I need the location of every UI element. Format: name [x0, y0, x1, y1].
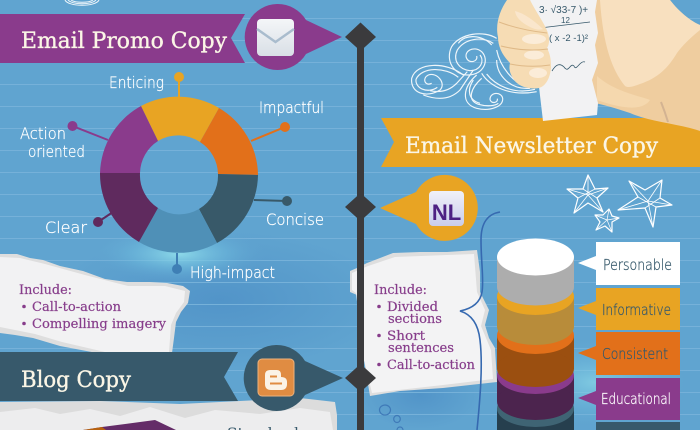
label: informative	[578, 288, 680, 330]
text: newsletter list	[374, 283, 476, 373]
callout: high-impact: High-impact	[190, 263, 275, 282]
fingers	[497, 0, 551, 88]
icon: star small	[567, 175, 608, 213]
bracket	[460, 212, 500, 430]
callout: concise	[254, 196, 324, 229]
label: consistent: Consistent	[602, 345, 668, 363]
decorative swirl: top left	[65, 0, 99, 5]
callout: concise: Concise	[266, 210, 324, 229]
bubble: newsletter icon	[380, 175, 478, 241]
segment: high-impact	[139, 208, 217, 253]
note paper: 3· √33-7 )+	[539, 4, 588, 16]
text: newsletter list: Divided	[387, 300, 438, 315]
segment: enticing	[141, 97, 219, 142]
callout: high-impact	[172, 253, 275, 282]
blog chart fragment	[83, 420, 176, 430]
banner: email newsletter copy	[381, 118, 700, 167]
palm	[590, 0, 700, 131]
timeline	[345, 22, 376, 430]
heading: email newsletter copy: Email Newsletter Copy	[405, 134, 659, 159]
text: email promo list	[19, 283, 167, 332]
callout: enticing	[109, 72, 184, 97]
icon: star large	[618, 180, 672, 227]
note paper: ( x -2 -1)²	[549, 33, 588, 44]
layer: consistent	[497, 335, 574, 387]
segment: clear	[100, 173, 158, 242]
text: newsletter list: Short	[387, 329, 426, 344]
callout: impactful	[251, 98, 324, 141]
layer: informative	[497, 296, 574, 345]
torn paper: email promo notes	[0, 254, 190, 353]
banner: email promo copy	[0, 14, 245, 63]
note paper: 12	[561, 16, 570, 25]
heading: email promo copy: Email Promo Copy	[21, 29, 228, 54]
callout: action oriented: oriented	[28, 142, 85, 161]
callout: impactful: Impactful	[259, 98, 324, 117]
layer: personable	[497, 238, 574, 306]
callout: clear	[45, 212, 113, 237]
label: informative: Informative	[602, 301, 671, 319]
segment: impactful	[200, 108, 258, 175]
illustration: hand holding note	[497, 0, 700, 131]
text: newsletter list: sections	[388, 312, 442, 327]
decorative stars	[567, 175, 672, 232]
text: newsletter list: sentences	[388, 341, 454, 356]
callout: enticing: Enticing	[109, 73, 164, 92]
icon: NL tile: NL	[432, 200, 461, 225]
callout: action oriented	[20, 121, 108, 161]
cylinder chart	[497, 238, 574, 430]
segment: action oriented	[100, 106, 158, 173]
text: newsletter list: Call-to-action	[387, 358, 476, 373]
text: newsletter list: Include:	[374, 283, 427, 298]
decorative bubbles	[380, 405, 403, 430]
icon: star tiny	[595, 209, 619, 232]
callout: clear: Clear	[45, 218, 87, 237]
donut chart	[100, 97, 258, 253]
layer: teal	[497, 390, 574, 430]
label: next layer fragment	[596, 422, 680, 430]
label: personable	[578, 242, 680, 285]
text: email promo list: Include:	[19, 283, 72, 298]
layer: educational	[497, 375, 574, 420]
callout: action oriented: Action	[20, 124, 66, 143]
segment: concise	[199, 174, 258, 243]
banner: blog copy	[0, 352, 238, 401]
icon: blogger	[258, 359, 294, 396]
icon: envelope	[257, 19, 294, 56]
torn paper: newsletter notes	[350, 250, 497, 396]
text: email promo list: Compelling imagery	[32, 317, 167, 332]
bubble: email icon	[245, 4, 342, 70]
text: email promo list: Call-to-action	[32, 300, 122, 315]
decorative swirl: wind	[412, 34, 537, 109]
note paper	[530, 0, 598, 121]
label: educational: Educational	[601, 390, 671, 408]
bubble: blog icon	[244, 345, 343, 411]
label: educational	[578, 378, 680, 420]
torn paper: blog notes	[0, 398, 337, 430]
label: personable: Personable	[603, 256, 672, 274]
label: consistent	[578, 332, 680, 375]
heading: blog copy: Blog Copy	[21, 368, 132, 393]
